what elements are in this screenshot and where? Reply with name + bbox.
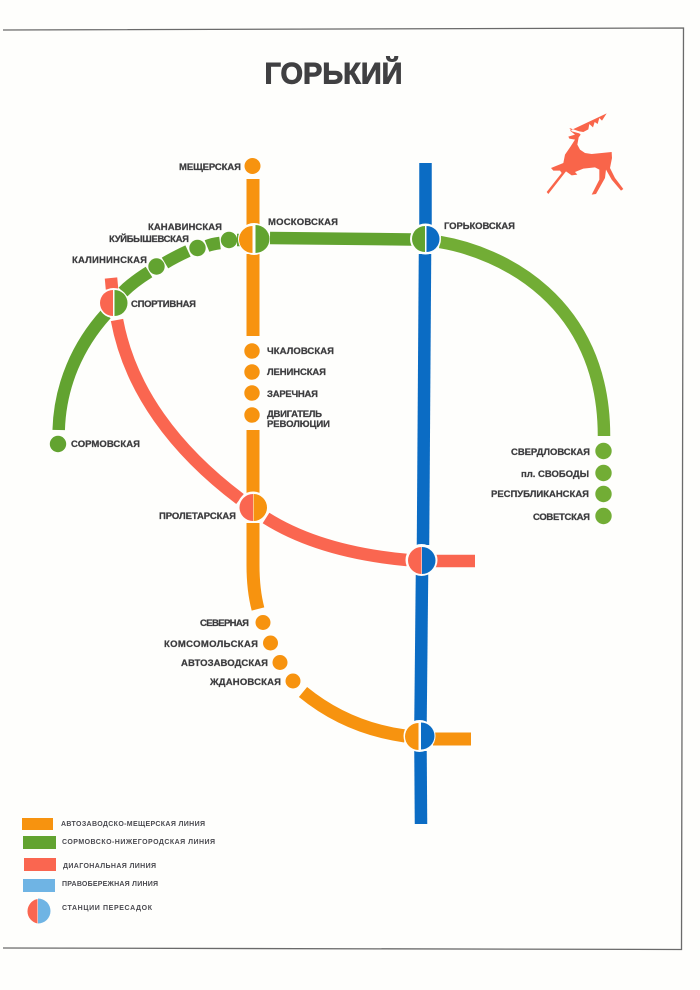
legend: green swatch: [23, 836, 56, 849]
legend: interchange label: СТАНЦИИ ПЕРЕСАДОК: [62, 905, 153, 912]
interchange: Gorkovskaya: [410, 224, 441, 254]
interchange: red and blue: [406, 544, 438, 576]
station labels: КОМСОМОЛЬСКАЯ: [164, 639, 258, 650]
title: ГОРЬКИЙ: [264, 56, 402, 90]
red line: Diagonal: [111, 278, 475, 561]
legend: orange swatch: [22, 818, 53, 830]
station labels: ЛЕНИНСКАЯ: [267, 367, 326, 378]
orange line: Avtozavodsko-Meshcherskaya: [253, 179, 471, 739]
station labels: ДВИГАТЕЛЬ: [267, 409, 322, 420]
station labels: МОСКОВСКАЯ: [268, 217, 338, 228]
legend: orange label: АВТОЗАВОДСКО-МЕЩЕРСКАЯ ЛИНИЯ: [61, 821, 205, 828]
green stations: [50, 232, 612, 524]
orange stations: [244, 158, 300, 688]
legend: blue label: ПРАВОБЕРЕЖНАЯ ЛИНИЯ: [62, 881, 158, 888]
legend: blue swatch: [23, 879, 55, 892]
station labels: КАЛИНИНСКАЯ: [72, 255, 147, 266]
station labels: ПРОЛЕТАРСКАЯ: [159, 511, 236, 522]
station labels: СЕВЕРНАЯ: [200, 618, 249, 629]
station labels: КУЙБЫШЕВСКАЯ: [109, 233, 189, 245]
station labels: АВТОЗАВОДСКАЯ: [181, 658, 268, 669]
station labels: СВЕРДЛОВСКАЯ: [511, 447, 590, 458]
icon: deer emblem: [547, 113, 623, 195]
legend: [22, 818, 215, 924]
station labels: ЗАРЕЧНАЯ: [267, 389, 318, 400]
station labels: ЧКАЛОВСКАЯ: [267, 346, 334, 357]
station labels: [71, 162, 590, 688]
station labels: ЖДАНОВСКАЯ: [209, 677, 281, 688]
interchange: orange and blue: [404, 720, 436, 752]
station labels: МЕЩЕРСКАЯ: [179, 162, 241, 173]
legend: green label: СОРМОВСКО-НИЖЕГОРОДСКАЯ ЛИНИЯ: [62, 839, 215, 846]
station labels: СПОРТИВНАЯ: [131, 299, 196, 310]
legend: red swatch: [24, 858, 56, 871]
station labels: СОРМОВСКАЯ: [71, 439, 140, 450]
legend: red label: ДИАГОНАЛЬНАЯ ЛИНИЯ: [63, 863, 156, 870]
interchange: Sportivnaya: [98, 288, 128, 318]
station labels: СОВЕТСКАЯ: [533, 512, 590, 523]
station labels: КАНАВИНСКАЯ: [148, 222, 222, 233]
station labels: РЕСПУБЛИКАНСКАЯ: [491, 489, 589, 500]
legend: interchange symbol: [27, 898, 50, 924]
station labels: пл. СВОБОДЫ: [521, 469, 589, 480]
blue line: Pravoberezhnaya: [420, 163, 426, 824]
station labels: РЕВОЛЮЦИИ: [267, 419, 330, 430]
green line: Sormovsko-Nizhegorodskaya: [59, 238, 412, 430]
interchange: Proletarskaya: [238, 492, 268, 522]
station labels: ГОРЬКОВСКАЯ: [444, 221, 515, 232]
interchange: Moskovskaya: [238, 223, 270, 255]
